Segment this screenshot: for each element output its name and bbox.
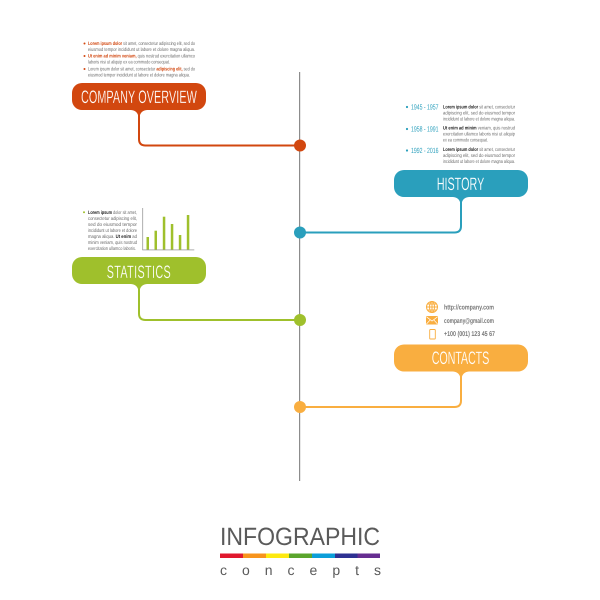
text block: history dates: 1992 - 2016	[411, 146, 438, 155]
connector: statistics	[139, 282, 300, 320]
text block: history descriptions: adipiscing elit, sed do eiusmod tempor	[443, 111, 515, 117]
text block: history descriptions: Lorem ipsum dolor sit amet, consectetur	[443, 105, 515, 111]
heading pill: company overview	[72, 83, 206, 117]
heading pill: contacts: CONTACTS	[432, 348, 489, 368]
connector: company overview	[139, 108, 300, 146]
text block: company overview: Lorem ipsum dolor sit amet, consectetur adipiscing elit, sed do	[88, 67, 195, 73]
text block: history descriptions	[443, 105, 515, 165]
icon: envelope	[426, 316, 438, 324]
panel: statistics	[72, 208, 306, 326]
title: INFOGRAPHIC	[220, 523, 380, 551]
rainbow bar	[220, 554, 380, 558]
icon: phone	[430, 330, 435, 339]
node: company overview	[294, 140, 306, 152]
text block: history descriptions: incididunt ut labore et dolore magna aliqua.	[443, 159, 515, 165]
panel: company overview	[72, 41, 306, 152]
panel: contacts	[294, 302, 528, 413]
node: statistics	[294, 314, 306, 326]
central timeline axis	[299, 72, 300, 481]
text block: statistics: minim veniam, quis nostrud	[88, 240, 137, 246]
text: website: http://company.com	[444, 303, 494, 311]
heading pill: statistics	[72, 257, 206, 291]
heading pill: history	[394, 170, 528, 204]
text block: history descriptions: adipiscing elit, sed do eiusmod tempor	[443, 153, 515, 159]
heading pill: company overview: COMPANY OVERVIEW	[81, 87, 197, 107]
text block: statistics: incididunt ut labore et dolore	[88, 228, 137, 234]
text block: history descriptions: Ut enim ad minim veniam, quis nostrud	[443, 126, 515, 132]
text block: statistics: exercitation ullamco laboris.	[88, 246, 136, 252]
text block: history dates	[406, 103, 438, 155]
text block: company overview	[84, 41, 195, 79]
heading pill: history: HISTORY	[437, 174, 484, 194]
text block: history descriptions: Lorem ipsum dolor sit amet, consectetur	[443, 147, 515, 153]
text block: company overview: Ut enim ad minim veniam, quis nostrud exercitation ullamco	[88, 54, 195, 60]
text block: company overview: laboris nisi ut aliquip ex ea commodo consequat.	[88, 60, 170, 66]
text: phone number: +100 (001) 123 45 67	[444, 330, 495, 338]
bar chart	[142, 208, 194, 250]
connector: history	[300, 195, 461, 232]
text block: history dates: 1945 - 1957	[411, 103, 438, 112]
text block: history descriptions: ex ea commodo consequat.	[443, 138, 488, 144]
connector: contacts	[300, 370, 461, 407]
text block: statistics: magna aliqua. Ut enim ad	[88, 234, 137, 240]
text block: statistics	[83, 210, 137, 252]
text block: history dates: 1958 - 1991	[411, 125, 438, 134]
text block: history descriptions: exercitation ullamco laboris nisi ut aliquip	[443, 132, 515, 138]
text block: statistics: consectetur adipiscing elit,	[88, 216, 137, 222]
subtitle: concepts	[220, 562, 381, 578]
text block: statistics: Lorem ipsum dolor sit amet,	[88, 210, 137, 216]
text block: company overview: eiusmod tempor incididunt ut labore et dolore magna aliqua.	[88, 47, 195, 53]
heading pill: contacts	[394, 344, 528, 378]
panel: history	[294, 103, 528, 238]
node: contacts	[294, 401, 306, 413]
icon: globe	[426, 302, 438, 312]
title block	[220, 523, 381, 578]
node: history	[294, 226, 306, 238]
heading pill: statistics: STATISTICS	[107, 262, 171, 282]
text block: company overview: eiusmod tempor incididunt ut labore et dolore magna aliqua.	[88, 73, 190, 79]
text block: history descriptions: incididunt ut labore et dolore magna aliqua.	[443, 117, 515, 123]
text: email: company@gmail.com	[444, 317, 494, 325]
text block: statistics: sed do eiusmod tempor	[88, 222, 137, 228]
text block: company overview: Lorem ipsum dolor sit amet, consectetur adipiscing elit, sed do	[88, 41, 195, 47]
